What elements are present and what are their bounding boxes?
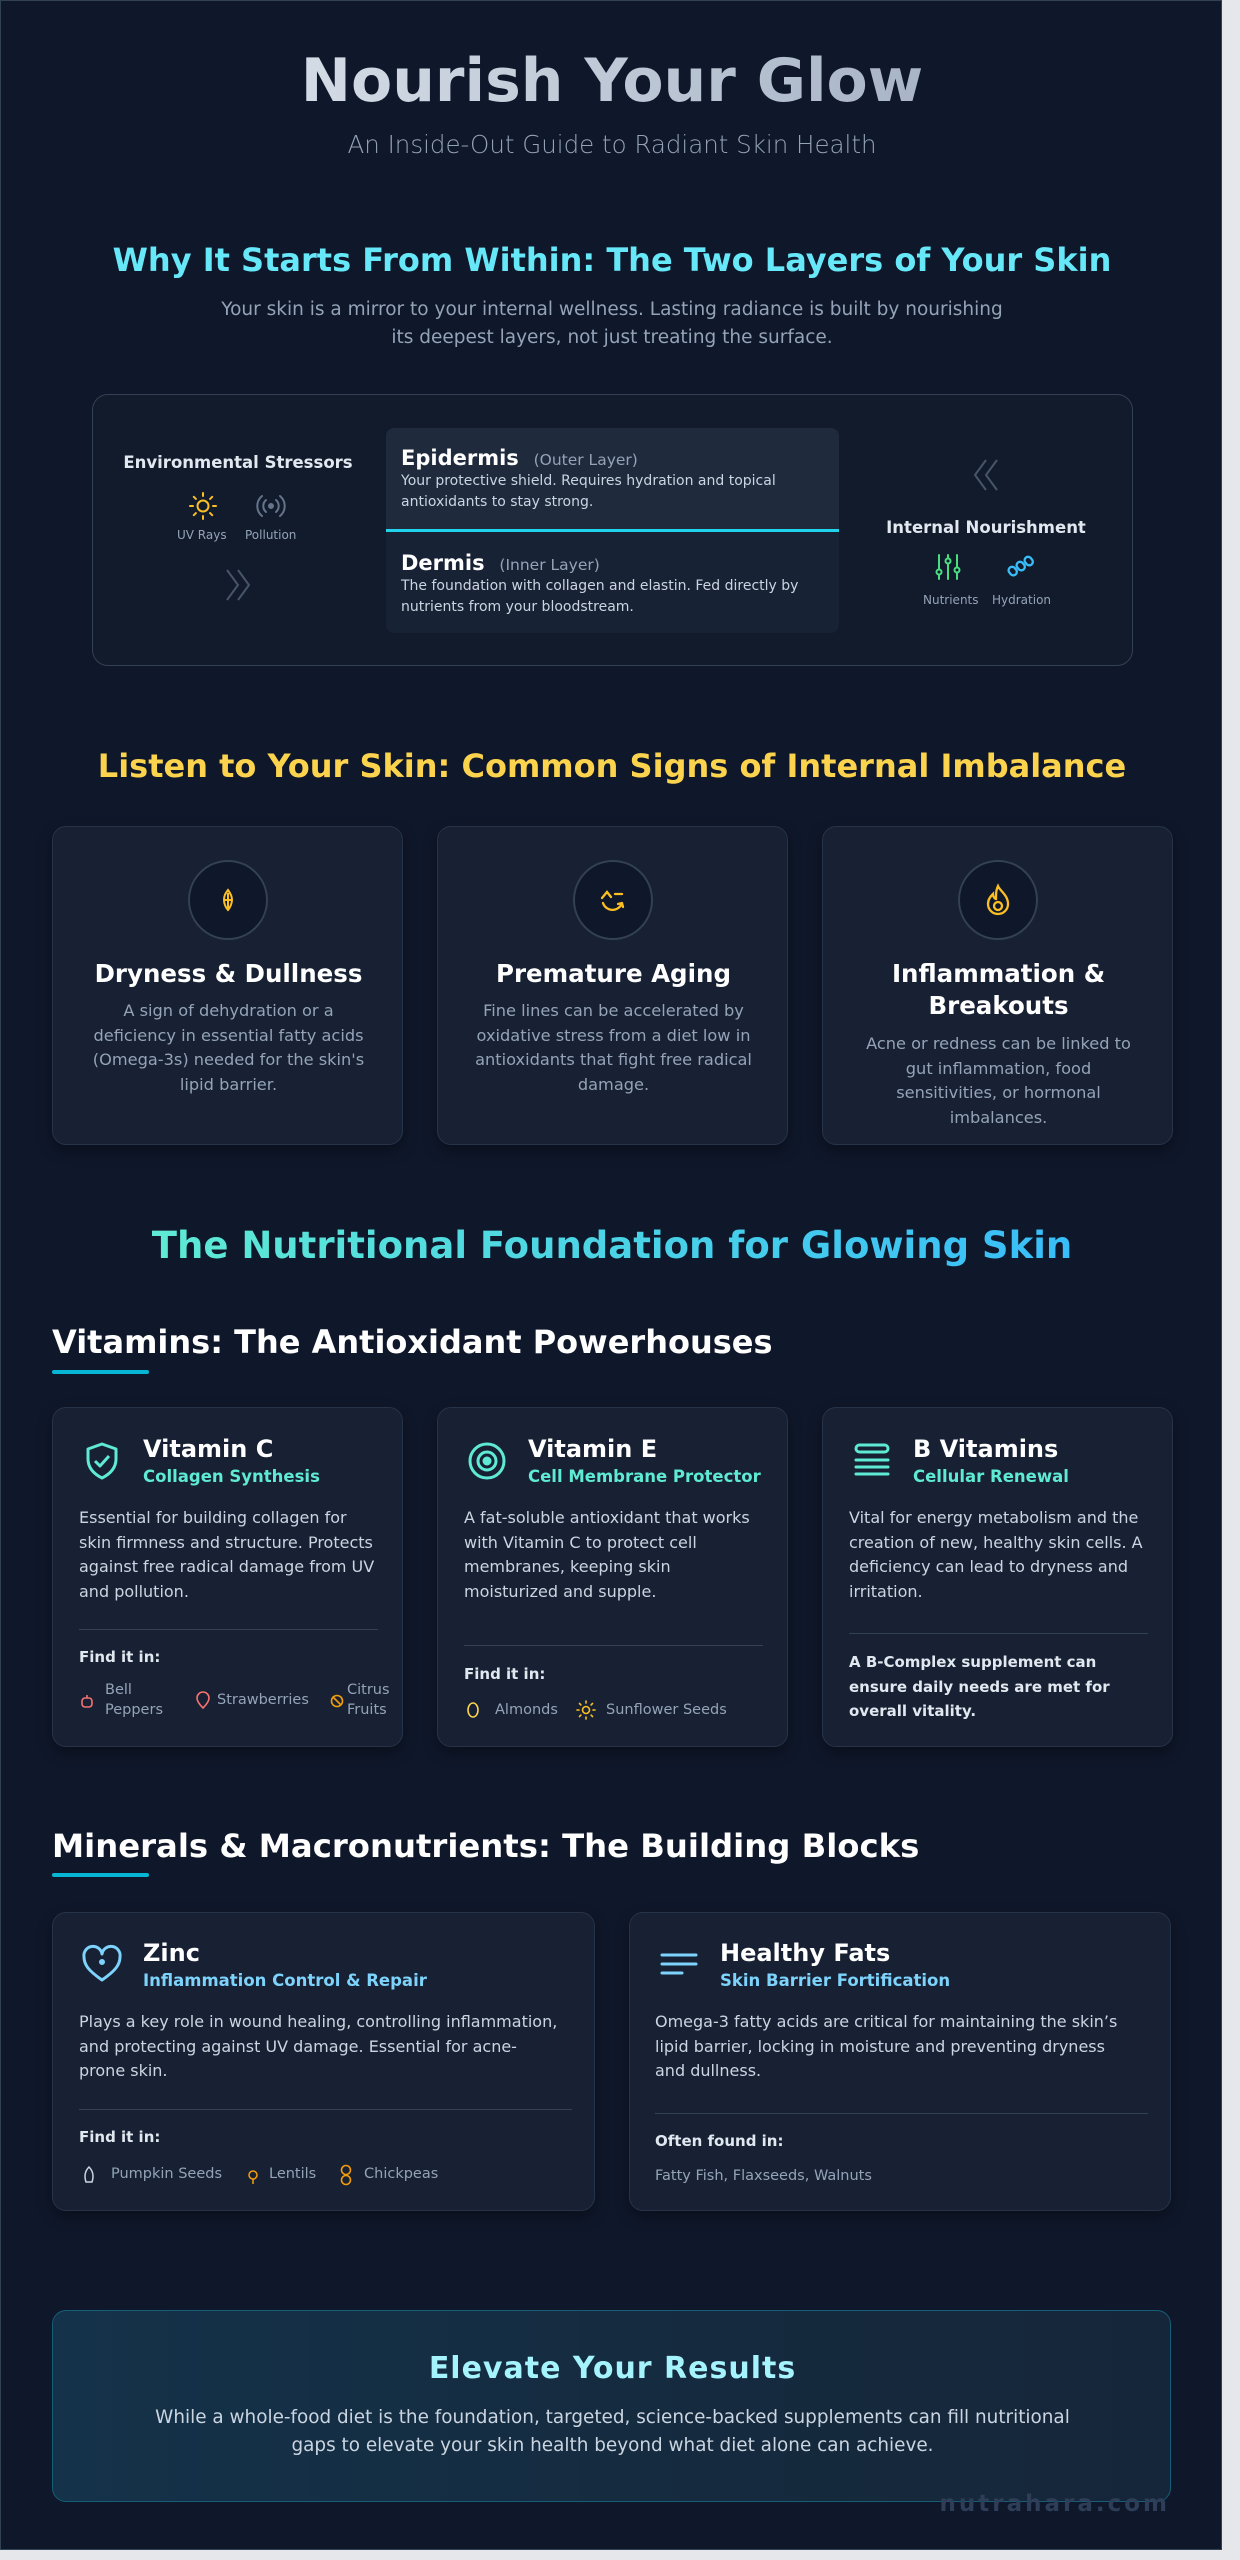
foods list: Pumpkin Seeds: [111, 2166, 222, 2182]
icon: stack: [854, 1444, 890, 1476]
card: premature aging: [437, 826, 788, 1145]
card: inflammation: [822, 826, 1173, 1145]
panel: skin layers diagram: [92, 394, 1133, 666]
callout: elevate your results: [52, 2310, 1171, 2502]
foods list: Lentils: [269, 2166, 316, 2182]
callout: elevate your results: While a whole-food diet is the foundation, targeted, science-backed supplements can fill nutritional: [155, 2407, 1070, 2428]
environmental stressors: Environmental Stressors: [123, 453, 353, 472]
icon: cycle: [573, 860, 653, 940]
card: premature aging: oxidative stress from a diet low in: [477, 1026, 750, 1044]
epidermis: Epidermis (Outer Layer): [401, 446, 638, 470]
card: b vitamins: B Vitamins: [913, 1435, 1058, 1463]
card: dryness: [52, 826, 403, 1145]
card: zinc: Plays a key role in wound healing, controlling inflammation,: [79, 2012, 557, 2031]
subtitle: An Inside-Out Guide to Radiant Skin Health: [348, 130, 876, 159]
card: healthy fats: lipid barrier, locking in moisture and preventing dryness: [655, 2036, 1105, 2056]
environmental stressors: [123, 453, 353, 600]
icon: sun: [189, 492, 217, 520]
callout: elevate your results: Elevate Your Results: [429, 2351, 796, 2386]
card: b vitamins: Vital for energy metabolism and the: [849, 1508, 1138, 1527]
card: zinc: prone skin.: [79, 2061, 168, 2080]
foods list: [84, 2164, 438, 2186]
arrow: inward chevrons: [974, 460, 998, 490]
card: zinc: Inflammation Control & Repair: [143, 1971, 427, 1990]
epidermis: [386, 428, 839, 529]
watermark: nutrahara.com: [939, 2491, 1170, 2517]
title: [1, 46, 1223, 116]
icon: nutrients: [936, 554, 960, 580]
card: inflammation: Breakouts: [928, 991, 1069, 1020]
card: dryness: A sign of dehydration or a: [123, 1001, 334, 1020]
intro paragraph: Your skin is a mirror to your internal wellness. Lasting radiance is built by nourishing: [221, 299, 1003, 320]
layer card: [386, 428, 839, 633]
card: vitamin e: A fat-soluble antioxidant that works: [464, 1508, 750, 1527]
card: b vitamins: deficiency can lead to dryness and: [849, 1557, 1128, 1576]
card: vitamin c: Collagen Synthesis: [143, 1467, 320, 1486]
card: healthy fats: Healthy Fats: [720, 1939, 890, 1967]
icon: droplet: [188, 860, 268, 940]
foods list: Peppers: [105, 1702, 163, 1718]
card: dryness: lipid barrier.: [180, 1074, 277, 1094]
card: vitamin e: membranes, keeping skin: [464, 1557, 671, 1576]
card: vitamin e: moisturized and supple.: [464, 1582, 656, 1600]
card: zinc: [52, 1912, 595, 2211]
card: vitamin c: and pollution.: [79, 1582, 189, 1600]
card: dryness: (Omega-3s) needed for the skin's: [93, 1050, 364, 1069]
card: b vitamins: irritation.: [849, 1582, 923, 1600]
card: b vitamins: ensure daily needs are met for: [849, 1678, 1110, 1696]
icon: heart: [82, 1944, 122, 1982]
card: zinc: and protecting against UV damage. Essential for acne-: [79, 2036, 517, 2056]
internal nourishment: Internal Nourishment: [886, 518, 1086, 537]
foods list: Chickpeas: [364, 2166, 438, 2182]
epidermis: Your protective shield. Requires hydration and topical: [401, 473, 776, 489]
card: vitamin c: skin firmness and structure. Protects: [79, 1532, 373, 1552]
icon: target: [468, 1442, 506, 1480]
title: Nourish Your Glow: [301, 46, 923, 116]
icon: shield: [86, 1442, 118, 1480]
card: b vitamins: [822, 1407, 1173, 1747]
heading: listen to your skin: Listen to Your Skin: Common Signs of Internal Imbalance: [98, 747, 1126, 785]
card: healthy fats: Omega-3 fatty acids are critical for maintaining the skin’s: [655, 2012, 1117, 2031]
card: healthy fats: Often found in:: [655, 2132, 784, 2150]
card: inflammation: Acne or redness can be linked to: [866, 1034, 1131, 1053]
card: dryness: deficiency in essential fatty acids: [93, 1026, 364, 1044]
foods list: [467, 1700, 727, 1720]
card: vitamin e: with Vitamin C to protect cell: [464, 1532, 697, 1552]
card: inflammation: sensitivities, or hormonal: [896, 1083, 1101, 1102]
foods list: Citrus: [347, 1682, 390, 1698]
card: inflammation: gut inflammation, food: [906, 1058, 1091, 1078]
card: vitamin e: Cell Membrane Protector: [528, 1467, 761, 1486]
epidermis: antioxidants to stay strong.: [401, 494, 593, 510]
dermis: The foundation with collagen and elastin. Fed directly by: [401, 578, 798, 594]
foods list: [81, 1682, 390, 1718]
card: premature aging: antioxidants that fight free radical: [475, 1050, 752, 1069]
dermis: nutrients from your bloodstream.: [401, 599, 634, 615]
card: b vitamins: Cellular Renewal: [913, 1467, 1069, 1486]
card: b vitamins: creation of new, healthy skin cells. A: [849, 1532, 1143, 1552]
card: healthy fats: and dullness.: [655, 2061, 761, 2080]
card: vitamin e: Vitamin E: [528, 1435, 657, 1463]
icon: flame: [958, 860, 1038, 940]
foods list: Strawberries: [217, 1692, 309, 1708]
dermis: Dermis (Inner Layer): [401, 551, 600, 575]
card: vitamin c: Find it in:: [79, 1648, 160, 1666]
heading: nutritional foundation: The Nutritional Foundation for Glowing Skin: [152, 1224, 1072, 1267]
card: premature aging: Fine lines can be accelerated by: [483, 1001, 744, 1020]
subheading: minerals: Minerals & Macronutrients: The Building Blocks: [52, 1827, 919, 1865]
card: inflammation: imbalances.: [950, 1108, 1047, 1126]
card: healthy fats: [629, 1912, 1171, 2211]
card: b vitamins: overall vitality.: [849, 1702, 976, 1720]
card: premature aging: damage.: [578, 1074, 649, 1094]
card: healthy fats: Skin Barrier Fortification: [720, 1971, 950, 1990]
subheading: vitamins: Vitamins: The Antioxidant Powerhouses: [52, 1323, 773, 1361]
card: zinc: Find it in:: [79, 2128, 160, 2146]
icon: lines: [660, 1954, 698, 1974]
intro paragraph: [221, 299, 1003, 348]
callout: elevate your results: gaps to elevate your skin health beyond what diet alone can achieve.: [291, 2435, 934, 2456]
card: inflammation: Inflammation &: [892, 959, 1105, 988]
internal nourishment: Hydration: [992, 593, 1051, 607]
card: premature aging: Premature Aging: [496, 959, 731, 988]
foods list: Sunflower Seeds: [606, 1702, 727, 1718]
internal nourishment: [886, 460, 1086, 607]
card: vitamin c: Vitamin C: [143, 1435, 273, 1463]
card: vitamin c: [52, 1407, 403, 1747]
foods list: Almonds: [495, 1702, 558, 1718]
foods list: Bell: [105, 1682, 132, 1698]
internal nourishment: Nutrients: [923, 593, 978, 607]
environmental stressors: UV Rays: [177, 528, 227, 542]
card: b vitamins: A B-Complex supplement can: [849, 1653, 1096, 1671]
foods list: Fruits: [347, 1702, 387, 1718]
intro paragraph: its deepest layers, not just treating the surface.: [391, 327, 833, 348]
dermis: [400, 551, 798, 615]
card: vitamin c: against free radical damage from UV: [79, 1557, 374, 1576]
icon: pollution: [256, 495, 286, 517]
arrow: inward chevrons: [226, 570, 250, 600]
card: vitamin c: Essential for building collagen for: [79, 1508, 347, 1527]
icon: hydration: [1007, 556, 1034, 576]
heading: why it starts from within: Why It Starts From Within: The Two Layers of Your Skin: [113, 241, 1111, 279]
environmental stressors: Pollution: [245, 528, 296, 542]
card: dryness: Dryness & Dullness: [95, 959, 362, 988]
card: zinc: Zinc: [143, 1939, 200, 1967]
card: vitamin e: Find it in:: [464, 1665, 545, 1683]
card: healthy fats: Fatty Fish, Flaxseeds, Walnuts: [655, 2168, 872, 2184]
card: vitamin e: [437, 1407, 788, 1747]
